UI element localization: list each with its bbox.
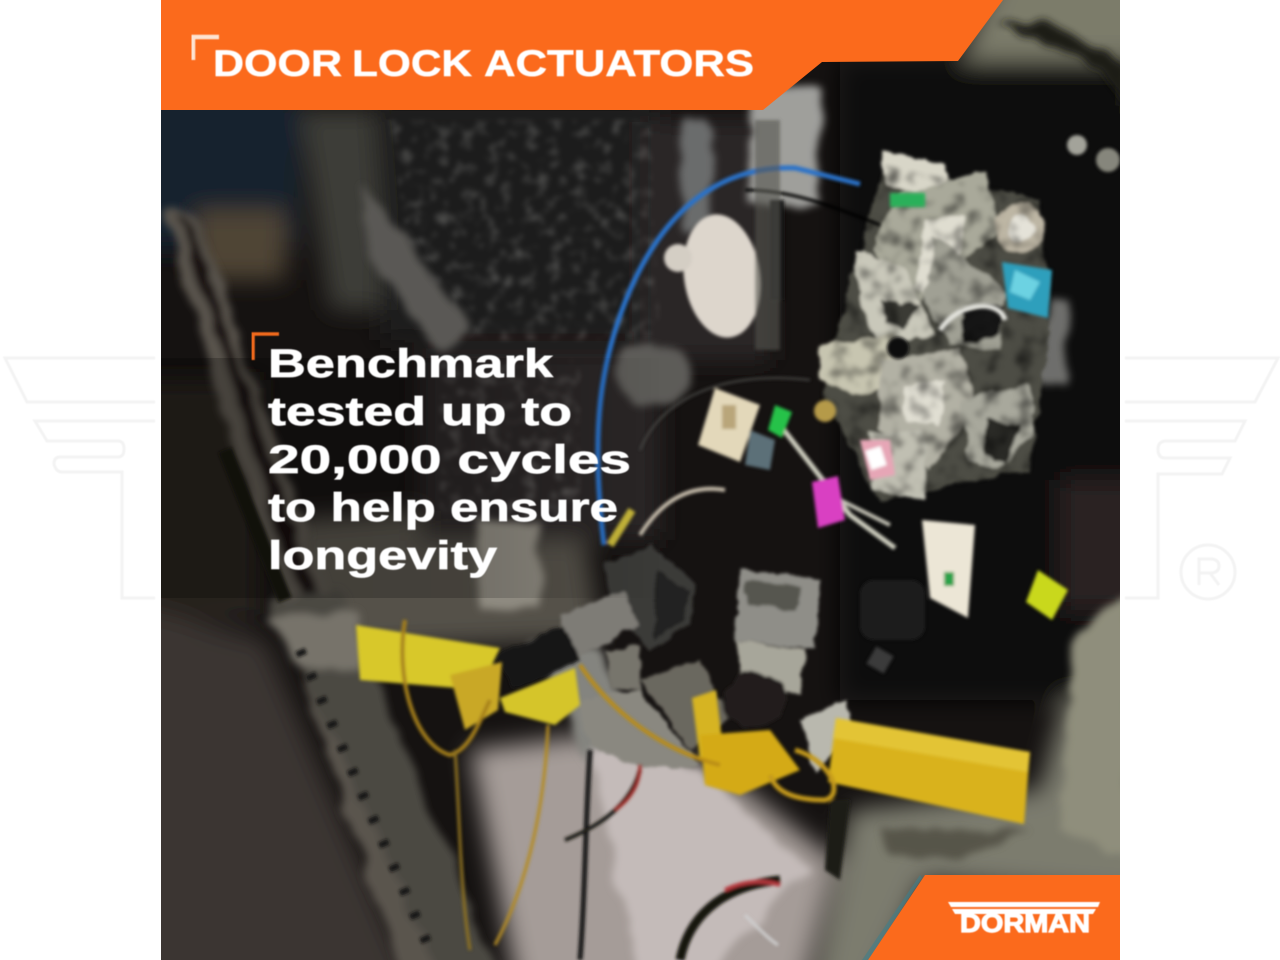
metal rail ticks: [300, 650, 430, 950]
logo: Dorman: DORMAN: [960, 908, 1090, 938]
title: DOOR: [213, 43, 342, 84]
actuator: test solenoid left: [495, 545, 695, 690]
speckled texture over upper-centre background: [390, 120, 660, 520]
yellow cylinder: [826, 736, 1031, 826]
title: LOCK: [352, 43, 472, 84]
yellow hose: [356, 625, 500, 690]
photo mid details: [165, 20, 1130, 960]
logo: Dorman: [948, 902, 1100, 938]
latch assembly: [820, 150, 1050, 500]
title: [213, 43, 754, 84]
header: orange banner: [161, 0, 1003, 110]
small screws top right: [1067, 135, 1087, 155]
callout text: tested up to: [268, 390, 572, 434]
title: ACTUATORS: [484, 43, 754, 84]
icon: orange corner bracket: [253, 334, 279, 360]
callout text: to help ensure: [268, 486, 618, 530]
callout text: 20,000 cycles: [268, 438, 631, 482]
latch and actuator details: [495, 150, 1050, 770]
icon: header corner bracket: [193, 37, 219, 60]
watermark: faint logo outline behind photo: [5, 358, 1278, 599]
callout text: longevity: [268, 534, 498, 578]
callout text: Benchmark: [268, 342, 554, 386]
latch coloured tags and wires: [640, 193, 1052, 548]
actuator: test solenoid right: [575, 570, 850, 770]
speckled shadows across latch: [820, 165, 1050, 500]
photo smooth details: [225, 120, 1120, 960]
connectors: [610, 388, 1068, 674]
yellow clamp: [692, 690, 722, 760]
callout text: [268, 342, 631, 578]
footer: orange logo tab: [862, 875, 1120, 960]
wires bottom: [580, 750, 590, 960]
icon: blue cable: [598, 168, 860, 545]
dark band behind text: [161, 358, 661, 598]
callout: benchmark text: [253, 334, 631, 578]
icon: white round disc: [681, 212, 762, 340]
